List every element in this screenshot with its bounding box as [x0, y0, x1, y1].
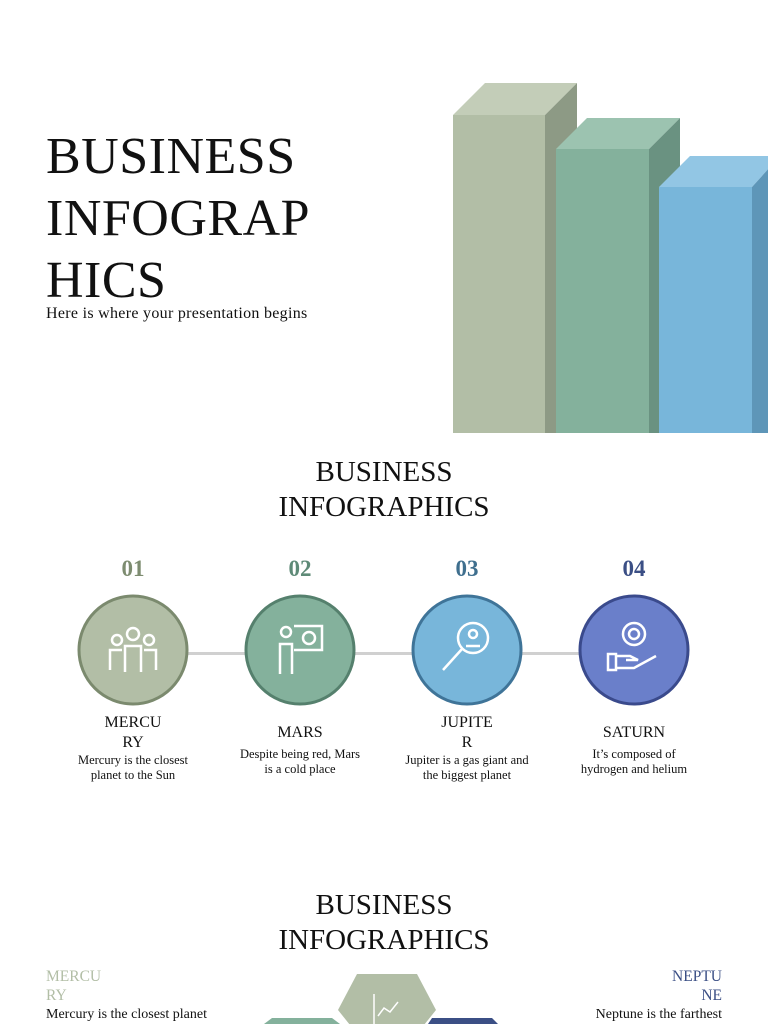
title — [46, 128, 310, 309]
right label neptune: NE — [701, 987, 722, 1004]
heading 3 — [278, 889, 490, 956]
step 02: Despite being red, Mars — [240, 747, 360, 761]
heading 3: BUSINESS — [316, 889, 452, 921]
step 01: 01 — [122, 556, 144, 581]
right label neptune: NEPTU — [672, 968, 722, 985]
step 01 — [78, 556, 188, 782]
step 01: planet to the Sun — [91, 768, 175, 782]
step 03: Jupiter is a gas giant and — [405, 753, 529, 767]
icon: search person — [412, 594, 522, 706]
step 02 — [240, 556, 360, 776]
timeline connector — [133, 652, 634, 655]
icon: presentation — [244, 594, 356, 706]
step 04: 04 — [622, 556, 646, 581]
title: BUSINESS — [46, 128, 296, 185]
left label mercury: Mercury is the closest planet — [46, 1007, 207, 1022]
step 01: RY — [122, 734, 144, 751]
heading 2: INFOGRAPHICS — [278, 491, 490, 523]
step 03: JUPITE — [441, 714, 493, 731]
step 03 — [405, 556, 529, 782]
step 03: 03 — [456, 556, 478, 581]
step 01: MERCU — [105, 714, 161, 731]
title: INFOGRAP — [46, 190, 310, 247]
left label mercury — [46, 968, 207, 1022]
step 02: is a cold place — [264, 762, 336, 776]
right label neptune — [596, 968, 722, 1022]
title: HICS — [46, 252, 166, 309]
step 03: the biggest planet — [423, 768, 511, 782]
left label mercury: MERCU — [46, 968, 101, 985]
heading 3: INFOGRAPHICS — [278, 924, 490, 956]
step 04: SATURN — [603, 724, 665, 741]
step 01: Mercury is the closest — [78, 753, 188, 767]
step 02: 02 — [288, 556, 312, 581]
step 04: It’s composed of — [592, 747, 676, 761]
heading 2 — [278, 456, 490, 523]
step 02: MARS — [277, 724, 323, 741]
right label neptune: Neptune is the farthest — [596, 1007, 722, 1022]
subtitle: Here is where your presentation begins — [46, 305, 308, 322]
step 04 — [578, 556, 690, 776]
icon: hand coin — [578, 594, 690, 706]
step 04: hydrogen and helium — [581, 762, 687, 776]
3D bar chart — [453, 83, 768, 433]
heading 2: BUSINESS — [316, 456, 452, 488]
step 03: R — [462, 734, 472, 751]
hexagon chart — [264, 974, 498, 1024]
icon: people — [78, 594, 188, 706]
left label mercury: RY — [46, 987, 67, 1004]
